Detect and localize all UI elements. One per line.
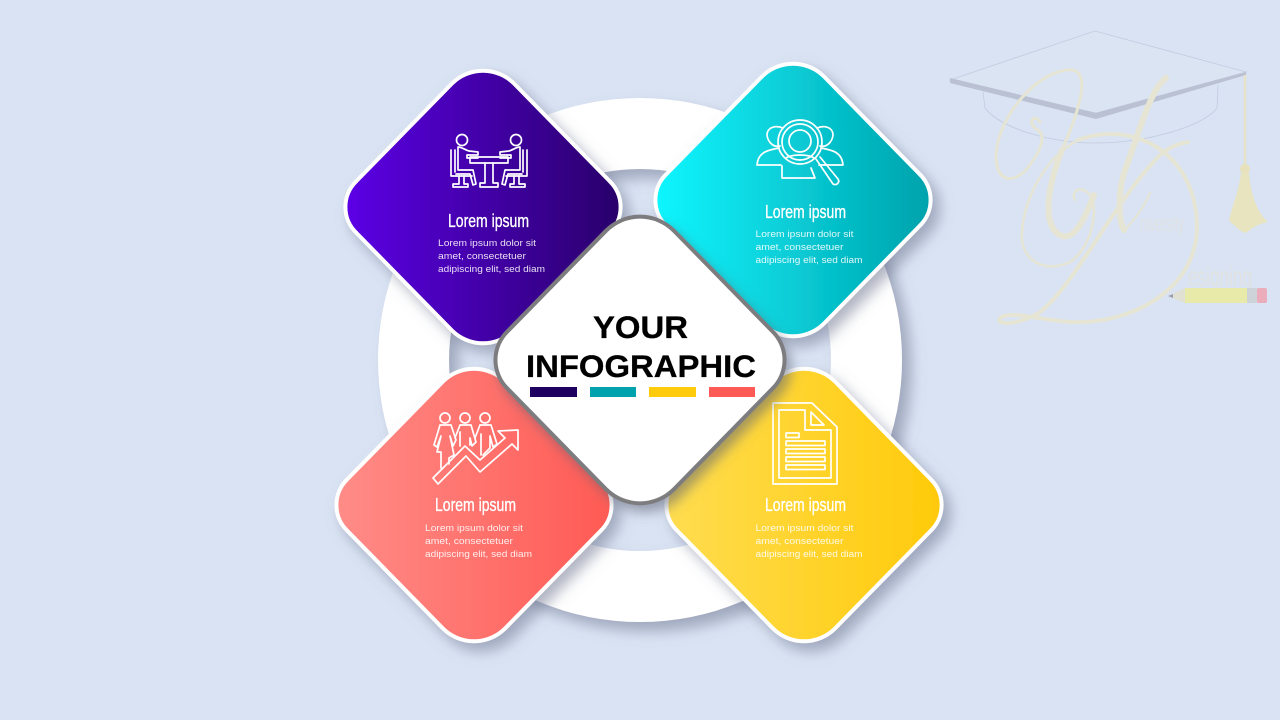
heading: purple: Lorem ipsum <box>448 211 529 231</box>
icon: two people meeting at table <box>451 134 527 187</box>
central diamond shape <box>495 217 785 503</box>
word: university: niversity <box>1140 211 1184 236</box>
text block: yellow: amet, consectetuer <box>756 536 844 547</box>
purple diamond shape <box>345 71 621 343</box>
yellow diamond shape <box>666 369 942 641</box>
white ring <box>378 98 902 622</box>
pencil <box>1168 288 1267 303</box>
panel: cyan diamond <box>655 64 931 336</box>
text block: purple: amet, consectetuer <box>438 251 527 262</box>
title: YOUR <box>593 309 688 345</box>
heading: yellow: Lorem ipsum <box>765 495 846 515</box>
graduation cap <box>950 31 1246 143</box>
text block: cyan: amet, consectetuer <box>756 242 844 253</box>
panel: yellow diamond <box>666 369 942 641</box>
heading: cyan: Lorem ipsum <box>765 202 846 222</box>
text block: yellow <box>756 523 863 560</box>
heading: red: Lorem ipsum <box>435 495 516 515</box>
text block: cyan: adipiscing elit, sed diam <box>756 255 863 266</box>
text block: red <box>425 523 532 560</box>
title <box>526 309 756 384</box>
panel: central diamond <box>495 217 785 503</box>
cyan diamond shape <box>655 64 931 336</box>
text block: purple <box>438 238 545 275</box>
text block: cyan: Lorem ipsum dolor sit <box>756 229 854 240</box>
text block: purple: Lorem ipsum dolor sit <box>438 238 536 249</box>
icon: people under magnifying glass <box>757 120 843 185</box>
text block: purple: adipiscing elit, sed diam <box>438 264 545 275</box>
script monogram <box>996 70 1197 323</box>
text block: yellow: adipiscing elit, sed diam <box>756 549 863 560</box>
watermark: university designing logo <box>950 31 1268 323</box>
red diamond shape <box>336 369 612 641</box>
icon: document <box>773 403 837 484</box>
text block: yellow: Lorem ipsum dolor sit <box>756 523 854 534</box>
text block: red: amet, consectetuer <box>425 536 514 547</box>
tassel <box>1229 75 1268 233</box>
text block: red: Lorem ipsum dolor sit <box>425 523 523 534</box>
title: INFOGRAPHIC <box>526 348 756 384</box>
panel: red diamond <box>336 369 612 641</box>
text block: red: adipiscing elit, sed diam <box>425 549 532 560</box>
panel: purple diamond <box>345 71 621 343</box>
icon: team with rising arrow <box>433 413 518 484</box>
colour key bars <box>530 387 755 397</box>
text block: cyan <box>756 229 863 266</box>
